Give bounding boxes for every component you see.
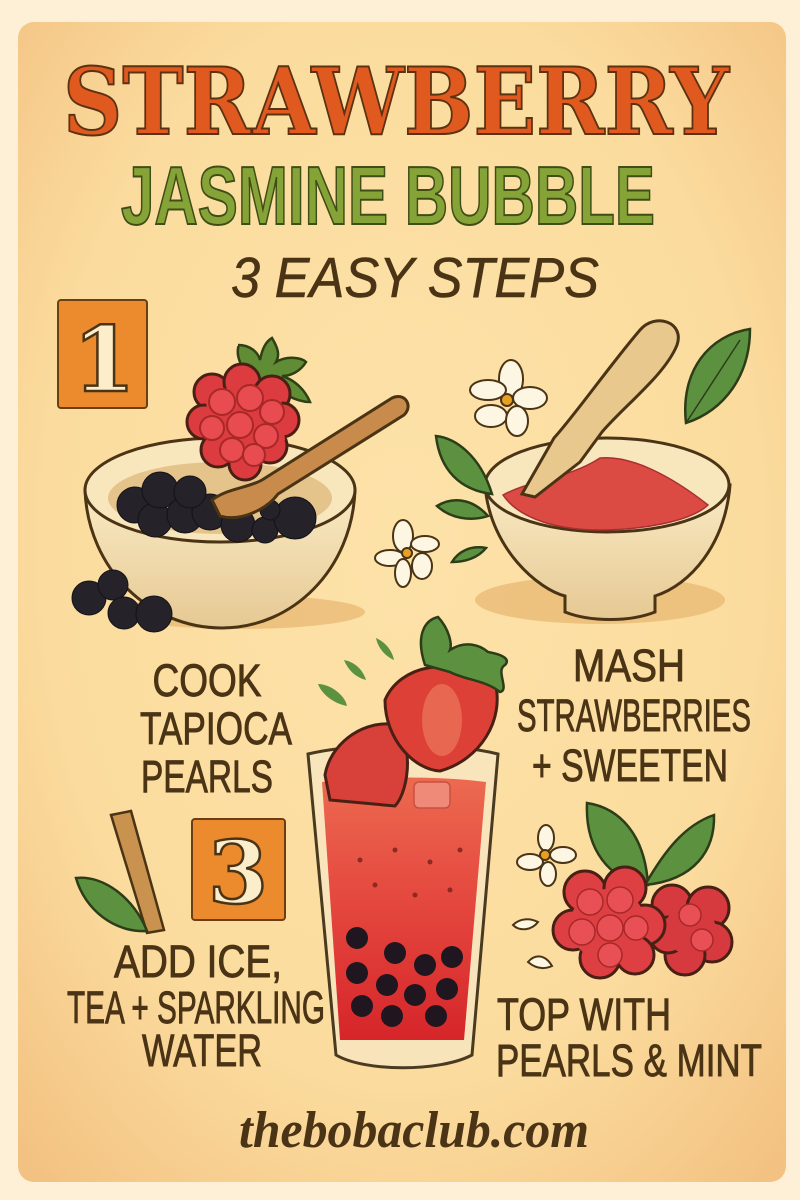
icon: bowl of mashed strawberries xyxy=(475,438,730,624)
step 1 badge xyxy=(58,300,147,413)
step 1 badge: 1 xyxy=(73,307,135,413)
label: step 3: WATER xyxy=(142,1025,262,1076)
title: STRAWBERRY xyxy=(63,47,730,156)
website footer: thebobaclub.com xyxy=(239,1102,589,1159)
label: step 2: + SWEETEN xyxy=(532,740,728,791)
label: step 4 xyxy=(496,989,762,1086)
tagline: 3 EASY STEPS xyxy=(231,246,599,310)
icon: strawberries on glass xyxy=(325,617,507,806)
icon: jasmine flower top xyxy=(470,360,547,436)
icon: bowl of tapioca pearls xyxy=(85,438,365,629)
icon: petals xyxy=(513,919,552,968)
label: step 3: TEA + SPARKLING xyxy=(67,982,325,1033)
label: step 4: TOP WITH xyxy=(497,989,671,1040)
label: step 1: PEARLS xyxy=(141,751,273,802)
icon: juice splashes xyxy=(318,638,394,706)
label: step 1: COOK xyxy=(152,655,262,706)
label: step 3 xyxy=(67,936,325,1076)
icon: spoon in bowl xyxy=(212,396,408,518)
label: step 1 xyxy=(140,655,292,802)
label: step 3: ADD ICE, xyxy=(114,936,282,987)
label: step 2 xyxy=(517,640,751,791)
icon: jasmine flower middle xyxy=(375,520,439,587)
icon: jasmine flower lower xyxy=(517,825,576,886)
icon: wooden spoon xyxy=(522,321,678,497)
label: step 2: MASH xyxy=(573,640,685,691)
icon: leaves beside bowl xyxy=(436,436,492,562)
icon: raspberries with mint xyxy=(553,803,732,978)
icon: glass of strawberry drink xyxy=(308,745,498,1068)
icon: leaf top right xyxy=(685,329,750,423)
label: step 1: TAPIOCA xyxy=(140,703,292,754)
icon: loose pearls xyxy=(72,570,172,632)
icon: cinnamon stick and leaf xyxy=(76,811,164,933)
step 3 badge: 3 xyxy=(208,823,268,924)
icon: raspberry strawberry xyxy=(187,338,310,480)
step 3 badge xyxy=(192,819,285,924)
